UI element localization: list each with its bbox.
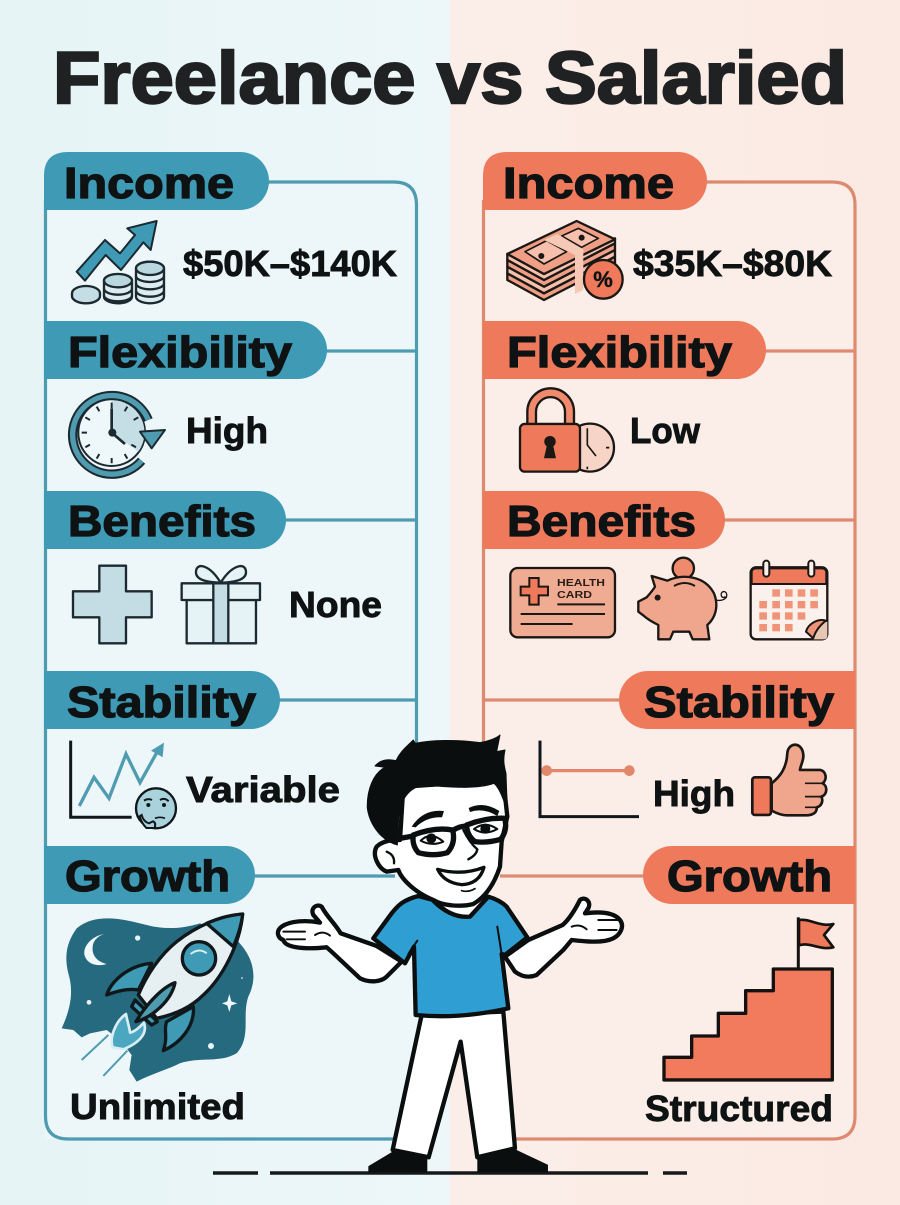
icon: health card bbox=[510, 568, 615, 637]
value: flexibility: Low bbox=[630, 410, 701, 451]
heading: stability bbox=[619, 671, 855, 729]
icon: thumbs up bbox=[752, 745, 826, 815]
icon: piggy bank bbox=[638, 558, 727, 639]
icon: flat line chart bbox=[540, 741, 639, 817]
background: left half bbox=[0, 0, 450, 1205]
hair bbox=[367, 735, 507, 845]
icon: rising arrow and coins bbox=[72, 221, 164, 303]
value: stability: High bbox=[653, 773, 735, 814]
shoes bbox=[369, 1150, 547, 1172]
head bbox=[375, 780, 507, 906]
neck crease bbox=[433, 902, 470, 917]
icon: medical cross bbox=[73, 566, 152, 643]
heading: stability: Stability bbox=[67, 678, 257, 727]
heading: stability bbox=[44, 671, 280, 729]
icon: cash stack with percent badge bbox=[507, 221, 623, 300]
neck bbox=[430, 892, 490, 917]
icon: health card: CARD bbox=[557, 589, 592, 601]
shirt bbox=[373, 896, 527, 1016]
icon label: percent sign: % bbox=[593, 267, 613, 292]
value: stability: Variable bbox=[186, 769, 340, 810]
icon: variable chart with thinking face bbox=[71, 741, 176, 828]
heading: growth: Growth bbox=[65, 852, 230, 901]
heading: income bbox=[483, 152, 707, 210]
heading: flexibility bbox=[483, 321, 766, 379]
heading: stability: Stability bbox=[644, 678, 835, 727]
brows bbox=[412, 805, 499, 827]
right arm and hand bbox=[505, 899, 622, 977]
value: flexibility: High bbox=[186, 410, 268, 451]
glasses bbox=[400, 818, 506, 855]
heading: benefits: Benefits bbox=[507, 497, 696, 546]
heading: flexibility: Flexibility bbox=[68, 328, 293, 377]
heading: income bbox=[44, 152, 269, 210]
heading: growth bbox=[643, 846, 855, 904]
heading: flexibility: Flexibility bbox=[507, 328, 733, 377]
icon: padlock with clock bbox=[520, 388, 614, 472]
nose and ear bbox=[387, 830, 477, 863]
panel: salaried bbox=[450, 152, 855, 1139]
heading: flexibility bbox=[44, 321, 327, 379]
panel: freelance bbox=[44, 152, 450, 1139]
legs bbox=[393, 1012, 515, 1157]
mouth bbox=[438, 867, 484, 885]
left arm and hand bbox=[278, 906, 402, 981]
title: Freelance vs Salaried bbox=[53, 38, 847, 119]
character: man shrugging bbox=[278, 735, 622, 1172]
icon: health card: HEALTH bbox=[557, 577, 605, 589]
value: income range: $35K–$80K bbox=[633, 243, 832, 284]
heading: income: Income bbox=[64, 159, 234, 208]
icon: clock with arrow bbox=[73, 396, 165, 474]
heading: benefits bbox=[483, 491, 725, 549]
heading: growth bbox=[44, 846, 255, 904]
heading: income: Income bbox=[503, 159, 674, 208]
ground line bbox=[213, 1171, 687, 1175]
value: income range: $50K–$140K bbox=[183, 243, 397, 284]
eyes bbox=[421, 824, 497, 844]
icon: rocket in night sky bbox=[62, 914, 253, 1082]
value: growth: Unlimited bbox=[70, 1086, 245, 1127]
heading: benefits bbox=[44, 491, 286, 549]
icon: gift box bbox=[182, 566, 260, 643]
heading: benefits: Benefits bbox=[68, 497, 256, 546]
value: benefits: None bbox=[289, 584, 382, 625]
icon: calendar bbox=[751, 561, 827, 639]
shirt folds bbox=[408, 927, 502, 954]
background: right half bbox=[450, 0, 900, 1205]
icon: stairs with flag bbox=[664, 917, 833, 1080]
heading: growth: Growth bbox=[667, 852, 832, 901]
value: growth: Structured bbox=[645, 1088, 833, 1129]
